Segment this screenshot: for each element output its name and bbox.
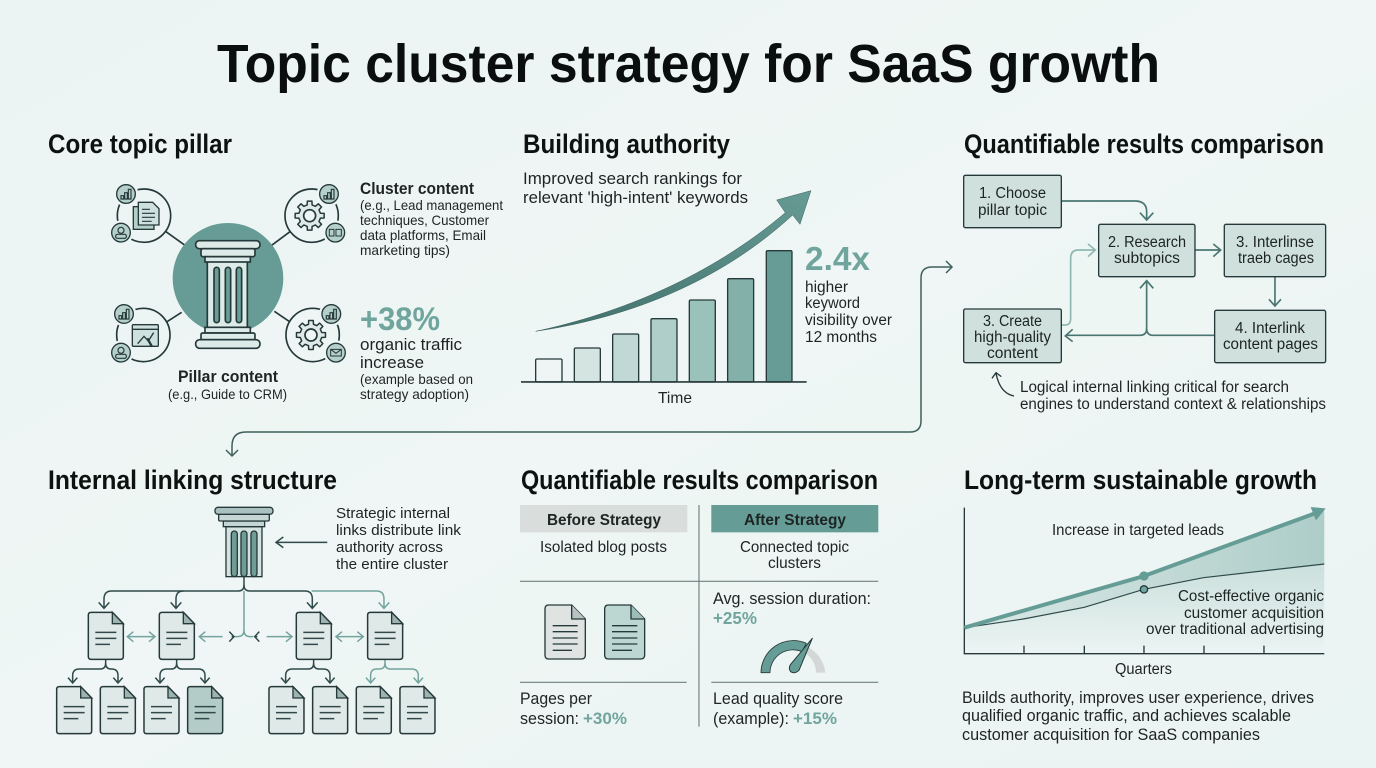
stat: keyword visibility: 12 months xyxy=(805,329,877,346)
step 1: 1. Choose xyxy=(979,185,1046,202)
heading: quantifiable results comparison: Quantifiable results comparison xyxy=(964,129,1324,159)
stat: lead quality score: +15% xyxy=(793,710,837,728)
icon: before doc xyxy=(545,605,585,659)
text: cluster content: Cluster content xyxy=(360,180,474,198)
text: improved rankings: relevant 'high-intent' keywords xyxy=(523,188,748,207)
icon: small pillar xyxy=(215,507,273,577)
chart label: cost-effective acquisition: Cost-effective organic xyxy=(1178,588,1324,605)
stat: session duration: Avg. session duration: xyxy=(713,590,871,608)
icon: central pillar xyxy=(196,241,260,348)
icon: gauge xyxy=(761,638,825,673)
summary text xyxy=(962,689,1314,744)
step 3 xyxy=(1236,234,1314,267)
text: cluster content xyxy=(360,180,503,258)
stat: keyword visibility xyxy=(805,240,892,346)
step 4 xyxy=(1223,320,1318,353)
summary text: customer acquisition for SaaS companies xyxy=(962,726,1260,744)
summary text: Builds authority, improves user experience, drives xyxy=(962,689,1314,707)
line: organic acquisition xyxy=(964,564,1324,628)
step 2 xyxy=(1108,234,1186,267)
text: isolated blog posts: Isolated blog posts xyxy=(540,539,667,556)
tree diagram xyxy=(57,507,435,734)
text: improved rankings: Improved search rankings for xyxy=(523,169,742,188)
table dividers and header bands xyxy=(520,505,878,727)
arrow: to pillar xyxy=(276,537,327,548)
step: create content: high-quality xyxy=(974,329,1051,346)
bar chart: keyword growth xyxy=(521,191,811,382)
chart label: cost-effective acquisition: customer acquisition xyxy=(1184,605,1324,622)
text: strategic internal links xyxy=(336,505,462,573)
panel: before and after comparison xyxy=(520,465,878,728)
stat: pages per session: session: xyxy=(520,710,579,728)
stat: organic traffic: strategy adoption) xyxy=(360,386,469,402)
text: improved rankings xyxy=(523,169,748,207)
icon: gear satellite top xyxy=(295,182,348,245)
text: strategic internal links: links distribute link xyxy=(336,522,462,539)
heading: core topic pillar: Core topic pillar xyxy=(48,129,232,159)
icon: after doc xyxy=(605,605,645,659)
stat: pages per session xyxy=(520,690,627,728)
arrow: targeted leads xyxy=(964,507,1326,628)
text: cluster content: marketing tips) xyxy=(360,242,450,258)
step 3: 3. Interlinse xyxy=(1236,234,1314,251)
stat: session duration xyxy=(713,590,871,628)
arrow: connector between rows xyxy=(226,261,952,456)
stat: keyword visibility: 2.4x xyxy=(805,240,871,277)
note: logical internal linking: Logical internal linking critical for search xyxy=(1020,379,1289,396)
stat: organic traffic: increase xyxy=(360,353,424,372)
text: strategic internal links: authority across xyxy=(336,539,443,556)
diagram: pillar with cluster satellites xyxy=(109,182,348,365)
panel: building authority xyxy=(521,129,892,407)
text: cluster content: (e.g., Lead management xyxy=(360,197,503,213)
stat: keyword visibility: keyword xyxy=(805,295,860,312)
step 2: 2. Research xyxy=(1108,234,1186,251)
stat: organic traffic: (example based on xyxy=(360,371,473,387)
heading: internal linking structure: Internal linking structure xyxy=(48,465,337,495)
stat: organic traffic: organic traffic xyxy=(360,335,463,354)
panel: long-term sustainable growth xyxy=(962,465,1326,744)
stat: lead quality score: Lead quality score xyxy=(713,690,843,708)
heading: building authority: Building authority xyxy=(523,129,730,159)
axis label: quarters: Quarters xyxy=(1115,661,1172,678)
stat: keyword visibility: visibility over xyxy=(805,312,892,329)
title: Topic cluster strategy for SaaS growth xyxy=(217,34,1160,94)
step 4: 4. Interlink xyxy=(1235,320,1305,337)
icon: gear satellite bottom xyxy=(296,302,348,365)
pillar circle xyxy=(173,223,283,334)
step 4: content pages xyxy=(1223,336,1318,353)
panel: core topic pillar xyxy=(48,129,503,402)
note: logical internal linking xyxy=(1020,379,1326,413)
note: logical internal linking: engines to understand context & relationships xyxy=(1020,396,1326,413)
step 1 xyxy=(978,185,1047,219)
text: connected topic clusters: clusters xyxy=(768,555,821,572)
step 3: traeb cages xyxy=(1238,250,1314,267)
icon: chart window satellite xyxy=(109,302,158,365)
panel: internal linking structure xyxy=(48,465,462,734)
heading: long-term sustainable growth: Long-term sustainable growth xyxy=(964,465,1317,495)
step 1: pillar topic xyxy=(978,202,1047,219)
text: pillar content: (e.g., Guide to CRM) xyxy=(168,386,287,402)
arrow: rising trend xyxy=(536,191,811,331)
stat: pages per session: +30% xyxy=(583,710,627,728)
step: create content xyxy=(974,313,1051,362)
text: pillar content: Pillar content xyxy=(178,368,278,386)
chart label: cost-effective acquisition xyxy=(1146,588,1324,638)
line chart: growth xyxy=(964,507,1326,654)
flowchart: steps xyxy=(964,175,1326,396)
heading: quantifiable results comparison: Quantifiable results comparison xyxy=(521,465,878,495)
text: cluster content: data platforms, Email xyxy=(360,227,486,243)
text: pillar content xyxy=(168,368,287,402)
text: strategic internal links: the entire cluster xyxy=(336,556,448,573)
column header: after: After Strategy xyxy=(744,512,846,529)
stat: keyword visibility: higher xyxy=(805,279,848,296)
step: create content: 3. Create xyxy=(983,313,1042,330)
column header: before: Before Strategy xyxy=(547,512,661,529)
stat: session duration: +25% xyxy=(713,608,757,628)
axis label: time: Time xyxy=(658,390,692,407)
step 2: subtopics xyxy=(1114,250,1180,267)
step: create content: content xyxy=(987,345,1039,362)
text: connected topic clusters: Connected topic xyxy=(740,539,849,556)
stat: lead quality score: (example): xyxy=(713,710,789,728)
text: cluster content: techniques, Customer xyxy=(360,212,489,228)
text: strategic internal links: Strategic internal xyxy=(336,505,450,522)
stat: organic traffic: +38% xyxy=(360,301,440,337)
stat: pages per session: Pages per xyxy=(520,690,592,708)
stat: lead quality score xyxy=(713,690,843,728)
chart label: increase in leads: Increase in targeted leads xyxy=(1052,522,1224,539)
panel: process flow xyxy=(964,129,1326,413)
icon: document satellite xyxy=(109,182,159,245)
summary text: qualified organic traffic, and achieves scalable xyxy=(962,707,1291,725)
stat: organic traffic xyxy=(360,301,473,402)
text: connected topic clusters xyxy=(740,539,849,572)
chart label: cost-effective acquisition: over traditional advertising xyxy=(1146,621,1324,638)
